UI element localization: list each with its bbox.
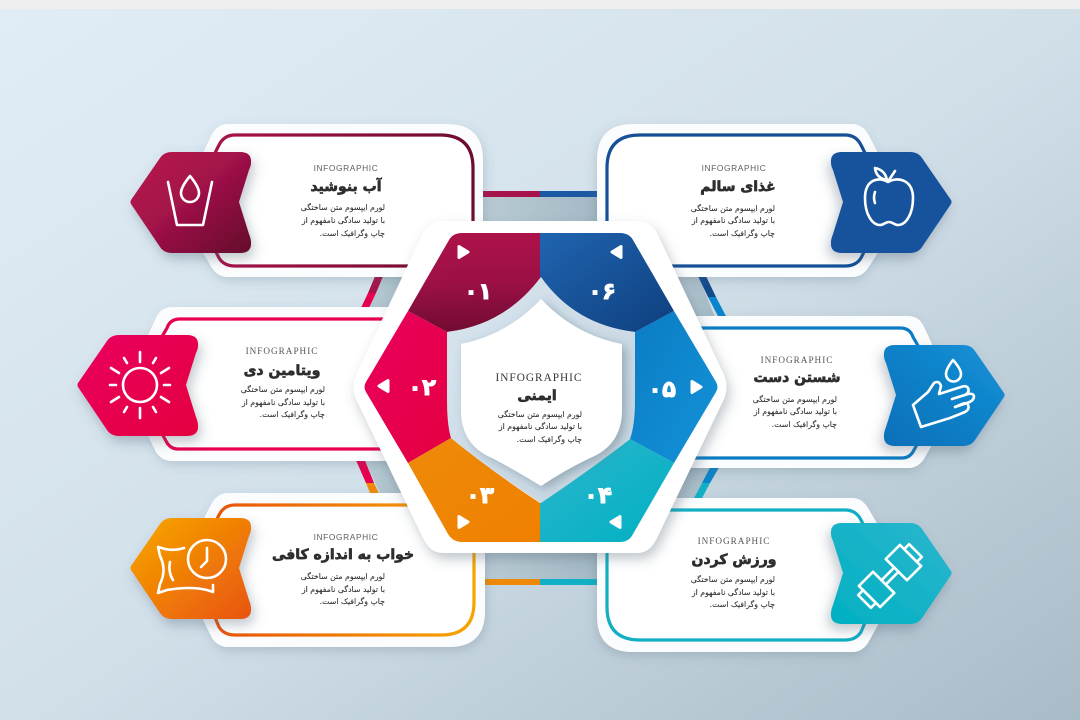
tag [831, 152, 952, 253]
label: INFOGRAPHIC [702, 163, 766, 173]
text block: با تولید سادگی نامفهوم از [301, 585, 385, 594]
text block: لورم ایپسوم متن ساختگی [753, 395, 837, 404]
heading: آب بنوشید [310, 177, 383, 195]
tag [130, 152, 251, 253]
center text block [498, 410, 582, 444]
icon: sun [110, 352, 170, 418]
card inner border [160, 319, 440, 449]
connector: lower right [660, 464, 721, 502]
tag [130, 518, 251, 619]
icon: pillow and clock [158, 540, 226, 593]
text block: لورم ایپسوم متن ساختگی [301, 203, 385, 212]
label: INFOGRAPHIC [698, 536, 770, 546]
segment 05 [630, 311, 718, 463]
text block: با تولید سادگی نامفهوم از [691, 588, 775, 597]
connector: upper left [359, 274, 420, 312]
heading: ویتامین دی [244, 363, 320, 379]
icon: hand with drop [913, 360, 974, 427]
text block: چاپ وگرافیک است. [320, 229, 385, 238]
panel: card 2 vitamin D [78, 307, 440, 461]
icon: dumbbell [854, 540, 926, 612]
text block: چاپ وگرافیک است. [260, 410, 325, 419]
center label: INFOGRAPHIC [496, 372, 582, 384]
number 06: ۰۶ [588, 279, 616, 305]
segment 01 [408, 233, 541, 332]
tag [884, 345, 1004, 446]
panel: card 1 water [130, 124, 483, 277]
panel: card 5 hand washing [640, 316, 1004, 468]
card inner border [607, 135, 866, 266]
text block: چاپ وگرافیک است. [320, 597, 385, 606]
center heading: ایمنی [517, 388, 557, 404]
card inner border [640, 328, 920, 458]
panel: card 3 sleep [130, 493, 485, 647]
card outer frame [597, 498, 878, 652]
text block: با تولید سادگی نامفهوم از [753, 407, 837, 416]
text block [241, 385, 325, 419]
top strip [0, 0, 1080, 9]
center text block: لورم ایپسوم متن ساختگی [498, 410, 582, 419]
text block: با تولید سادگی نامفهوم از [301, 216, 385, 225]
heading: ورزش کردن [692, 552, 776, 568]
shield [461, 299, 622, 486]
icon: glass with drop [168, 176, 212, 225]
card inner border [214, 505, 474, 635]
card inner border [214, 135, 473, 266]
number 03: ۰۳ [466, 483, 494, 509]
connector: upper right [660, 274, 728, 320]
center text block: با تولید سادگی نامفهوم از [498, 422, 582, 431]
text block [301, 572, 385, 606]
heading: خواب به اندازه کافی [272, 547, 414, 563]
number 04: ۰۴ [584, 483, 612, 509]
tag [831, 523, 952, 624]
text block: لورم ایپسوم متن ساختگی [301, 572, 385, 581]
card outer frame [640, 316, 932, 468]
card outer frame [203, 493, 485, 647]
central hexagon [354, 221, 726, 553]
text block [753, 395, 837, 429]
text block: لورم ایپسوم متن ساختگی [691, 204, 775, 213]
label: INFOGRAPHIC [761, 355, 833, 365]
text block [301, 203, 385, 238]
number 01: ۰۱ [464, 279, 492, 305]
shield backing [447, 277, 635, 503]
text block: چاپ وگرافیک است. [710, 600, 775, 609]
segment 02 [364, 311, 451, 463]
tag [78, 335, 198, 436]
panel: card 4 exercise [597, 498, 952, 652]
segment 04 [540, 439, 674, 542]
text block [691, 204, 775, 238]
text block: لورم ایپسوم متن ساختگی [691, 575, 775, 584]
heading: شستن دست [754, 370, 840, 386]
hexagon white frame [354, 221, 726, 553]
segment 03 [408, 438, 540, 542]
text block [691, 575, 775, 609]
label: INFOGRAPHIC [314, 163, 378, 173]
connector: top [480, 191, 600, 227]
connector: bottom [480, 548, 600, 585]
text block: چاپ وگرافیک است. [710, 229, 775, 238]
icon: apple [865, 168, 913, 225]
text block: لورم ایپسوم متن ساختگی [241, 385, 325, 394]
card inner border [607, 510, 866, 640]
card outer frame [148, 307, 440, 461]
number 02: ۰۲ [408, 375, 436, 401]
connector: lower left [355, 458, 420, 498]
card outer frame [203, 124, 483, 277]
panel: card 6 food [597, 124, 952, 277]
number 05: ۰۵ [648, 377, 676, 403]
segment 06 [540, 233, 674, 332]
text block: با تولید سادگی نامفهوم از [241, 398, 325, 407]
label: INFOGRAPHIC [246, 346, 318, 356]
card outer frame [597, 124, 878, 277]
connectors between cards and hexagon [355, 191, 728, 585]
label: INFOGRAPHIC [314, 532, 378, 542]
center text block: چاپ وگرافیک است. [517, 435, 582, 444]
arrow markers [379, 246, 701, 528]
text block: چاپ وگرافیک است. [772, 420, 837, 429]
heading: غذای سالم [700, 179, 776, 195]
text block: با تولید سادگی نامفهوم از [691, 216, 775, 225]
